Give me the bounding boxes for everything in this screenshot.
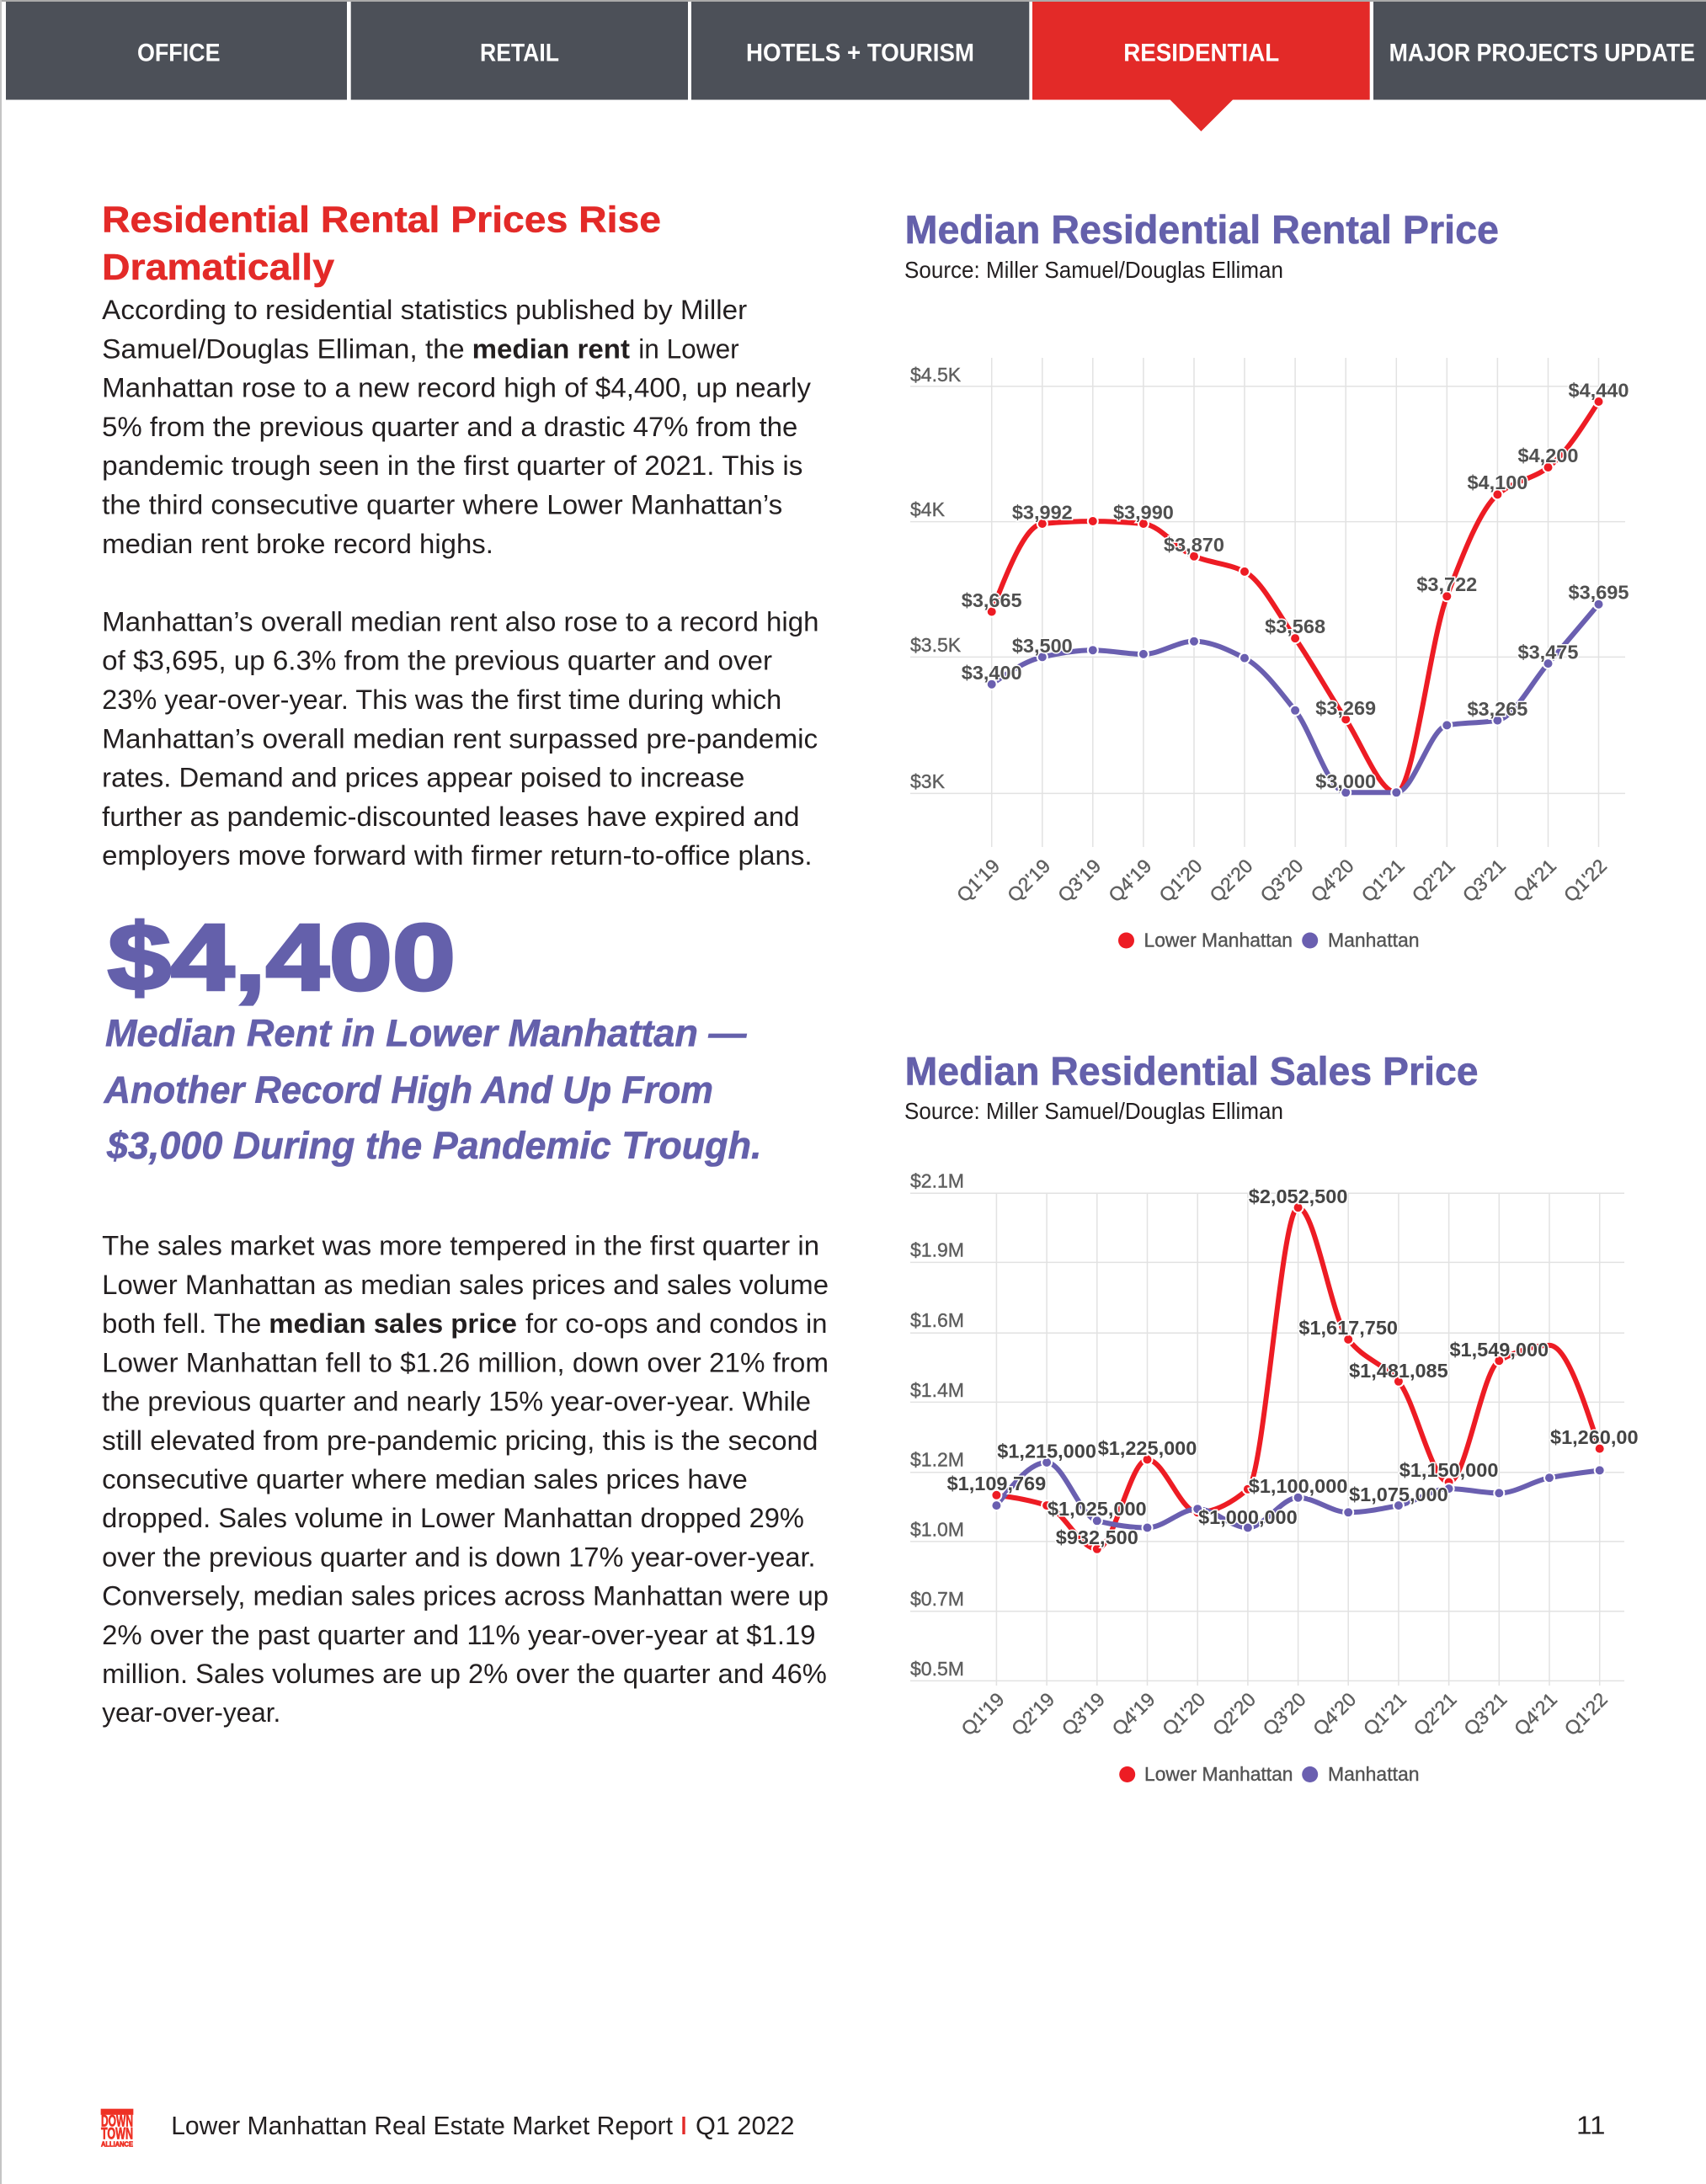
data labels [962, 379, 1629, 792]
x axis labels [952, 855, 1611, 906]
tab: retail [351, 2, 688, 99]
x axis labels [957, 1688, 1612, 1739]
text block: sales market paragraph: million. Sales volumes are up 2% over the quarter and 46% [102, 1659, 827, 1689]
text block: median rent paragraph: in Lower [638, 333, 739, 364]
tab: office: OFFICE [137, 40, 221, 67]
data labels: $3,400 [962, 662, 1022, 684]
text block: median rent paragraph: 5% from the previous quarter and a drastic 47% from the [102, 412, 797, 442]
y axis labels: $4K [910, 498, 946, 520]
panel: median residential sales price chart [904, 1049, 1639, 1785]
data labels: $3,000 [1315, 770, 1376, 792]
line: Lower Manhattan [992, 402, 1598, 792]
callout caption: Median Rent in Lower Manhattan — [105, 1012, 747, 1055]
tab: retail: RETAIL [480, 40, 559, 67]
text block: overall Manhattan rent paragraph: further as pandemic-discounted leases have expired and [102, 802, 799, 832]
data labels: $3,695 [1569, 582, 1629, 604]
x axis labels: Q4'19 [1104, 855, 1155, 906]
y axis labels: $0.7M [910, 1588, 964, 1610]
tab: hotels + tourism [691, 2, 1029, 99]
text block: overall Manhattan rent paragraph: of $3,695, up 6.3% from the previous quarter and over [102, 646, 772, 676]
text block: median rent paragraph: median rent [472, 333, 630, 364]
points: Manhattan [987, 599, 1603, 797]
text block: sales market paragraph: year-over-year. [102, 1697, 280, 1728]
points: Lower Manhattan [991, 1202, 1605, 1554]
navigation tabs [6, 2, 1706, 131]
heading: rental prices: Residential Rental Prices Rise [102, 200, 661, 241]
text block: overall Manhattan rent paragraph: rates. Demand and prices appear poised to increase [102, 763, 744, 793]
data labels: $1,260,00 [1550, 1426, 1639, 1448]
data labels: $1,025,000 [1048, 1498, 1147, 1520]
text block: median rent paragraph: Manhattan rose to a new record high of $4,400, up nearly [102, 373, 811, 403]
text block: sales market paragraph: both fell. The [102, 1308, 261, 1339]
data labels: $3,269 [1315, 697, 1376, 719]
text block: overall Manhattan rent paragraph: Manhattan’s overall median rent also rose to a record high [102, 606, 818, 637]
data labels: $3,990 [1113, 502, 1174, 524]
data labels: $3,475 [1518, 642, 1578, 663]
data labels: $1,000,000 [1198, 1506, 1298, 1528]
text block: median rent paragraph: median rent broke record highs. [102, 529, 493, 559]
text block: overall Manhattan rent paragraph: 23% year-over-year. This was the first time during which [102, 684, 781, 715]
callout caption [104, 1012, 761, 1167]
x axis labels: Q2'19 [1003, 855, 1054, 906]
text block: sales market paragraph: Lower Manhattan as median sales prices and sales volume [102, 1270, 829, 1300]
x axis labels: Q1'20 [1158, 1688, 1209, 1739]
x axis labels: Q3'21 [1459, 1688, 1511, 1739]
data labels: $2,052,500 [1249, 1185, 1347, 1207]
points: Lower Manhattan [987, 397, 1603, 797]
chart source: Source: Miller Samuel/Douglas Elliman [904, 1098, 1283, 1124]
tab: hotels + tourism: HOTELS + TOURISM [746, 40, 974, 67]
x axis labels: Q3'20 [1258, 1688, 1310, 1739]
y axis labels: $1.4M [910, 1379, 964, 1401]
chart source: Source: Miller Samuel/Douglas Elliman [904, 257, 1283, 283]
x axis labels: Q1'21 [1357, 855, 1409, 906]
text block: median rent paragraph: the third consecutive quarter where Lower Manhattan’s [102, 490, 782, 520]
tab: major projects update [1373, 2, 1706, 99]
text block: median rent paragraph: pandemic trough seen in the first quarter of 2021. This is [102, 450, 802, 481]
callout: $4,400 median rent [104, 904, 761, 1167]
data labels [947, 1185, 1639, 1548]
data labels: $4,440 [1569, 379, 1629, 401]
x axis labels: Q4'21 [1509, 855, 1560, 906]
legend: Lower Manhattan [1144, 930, 1293, 951]
line: Manhattan [992, 605, 1598, 792]
callout caption: Another Record High And Up From [104, 1068, 713, 1111]
x axis labels: Q1'19 [957, 1688, 1009, 1739]
x axis labels: Q4'20 [1309, 1688, 1360, 1739]
x axis labels: Q3'19 [1053, 855, 1105, 906]
tab: residential (active) [1032, 2, 1370, 131]
legend: Manhattan [1328, 1763, 1420, 1785]
text block: sales market paragraph: The sales market was more tempered in the first quarter in [102, 1231, 819, 1261]
data labels: $1,617,750 [1298, 1317, 1398, 1339]
x axis labels: Q2'21 [1408, 855, 1459, 906]
y axis labels: $2.1M [910, 1170, 964, 1192]
text block: overall Manhattan rent paragraph: Manhattan’s overall median rent surpassed pre-pandemic [102, 723, 818, 754]
x axis labels: Q1'22 [1559, 855, 1611, 906]
x axis labels: Q1'19 [952, 855, 1004, 906]
text block: sales market paragraph: for co-ops and condos in [525, 1308, 827, 1339]
tab: office [6, 2, 347, 99]
text block: sales market paragraph [102, 1231, 829, 1728]
x axis labels: Q1'20 [1154, 855, 1207, 906]
text block: sales market paragraph: dropped. Sales volume in Lower Manhattan dropped 29% [102, 1503, 804, 1533]
icon: Downtown Alliance logo: TOWN [101, 2125, 133, 2144]
data labels: $4,100 [1467, 471, 1527, 493]
text block: sales market paragraph: consecutive quarter where median sales prices have [102, 1464, 748, 1494]
data labels: $1,225,000 [1098, 1437, 1197, 1459]
data labels: $3,870 [1164, 534, 1224, 556]
x axis labels: Q3'20 [1256, 855, 1308, 906]
text block: median rent paragraph: Samuel/Douglas Elliman, the [102, 333, 465, 364]
panel: median residential rental price chart [904, 207, 1629, 951]
y axis labels [910, 364, 962, 792]
chart title: Median Residential Sales Price [905, 1049, 1479, 1093]
text block: median rent paragraph: According to residential statistics published by Miller [102, 295, 748, 325]
footer report title: Q1 2022 [696, 2111, 795, 2140]
text block: median rent paragraph [102, 295, 811, 559]
data labels: $1,215,000 [997, 1440, 1096, 1462]
x axis labels: Q2'21 [1409, 1688, 1461, 1739]
data labels: $1,109,769 [947, 1473, 1046, 1494]
x axis labels: Q3'21 [1458, 855, 1510, 906]
text block: sales market paragraph: Conversely, median sales prices across Manhattan were up [102, 1581, 829, 1611]
data labels: $3,265 [1467, 698, 1527, 720]
text block: sales market paragraph: over the previous quarter and is down 17% year-over-year. [102, 1542, 816, 1572]
tab: residential (active): RESIDENTIAL [1123, 40, 1279, 67]
text block: sales market paragraph: still elevated from pre-pandemic pricing, this is the second [102, 1425, 818, 1456]
data labels: $3,500 [1012, 635, 1073, 657]
data labels: $1,549,000 [1449, 1339, 1549, 1361]
text block: sales market paragraph: the previous quarter and nearly 15% year-over-year. While [102, 1387, 811, 1417]
data labels: $3,992 [1012, 502, 1073, 524]
data labels: $3,665 [962, 589, 1022, 611]
y axis labels: $4.5K [910, 364, 962, 386]
x axis labels: Q2'20 [1205, 855, 1257, 906]
data labels: $3,722 [1416, 573, 1477, 595]
data labels: $1,481,085 [1349, 1360, 1448, 1382]
footer [101, 2109, 1605, 2149]
y axis labels: $1.9M [910, 1239, 964, 1261]
legend: Manhattan [1328, 930, 1420, 951]
y axis labels: $1.2M [910, 1448, 964, 1470]
data labels: $1,100,000 [1249, 1475, 1347, 1497]
data labels: $3,568 [1265, 615, 1325, 637]
y axis labels: $3K [910, 770, 946, 792]
x axis labels: Q4'19 [1107, 1688, 1160, 1739]
text block: overall Manhattan rent paragraph [102, 606, 818, 871]
y axis labels: $1.6M [910, 1309, 964, 1331]
x axis labels: Q2'19 [1007, 1688, 1058, 1739]
heading: rental prices [102, 200, 661, 288]
icon: Downtown Alliance logo [101, 2109, 134, 2149]
callout caption: $3,000 During the Pandemic Trough. [106, 1124, 762, 1167]
y axis labels: $1.0M [910, 1519, 964, 1541]
data labels: $1,075,000 [1349, 1484, 1448, 1505]
x axis labels: Q3'19 [1058, 1688, 1109, 1739]
legend [1119, 1763, 1420, 1785]
line: Lower Manhattan [996, 1207, 1600, 1549]
legend: Lower Manhattan [1144, 1763, 1293, 1785]
y axis labels: $3.5K [910, 634, 962, 656]
icon: Downtown Alliance logo: DOWN [101, 2113, 133, 2130]
chart title: Median Residential Rental Price [905, 207, 1499, 252]
icon: Downtown Alliance logo: ALLIANCE [101, 2140, 134, 2149]
data labels: $932,500 [1056, 1526, 1138, 1548]
text block: sales market paragraph: 2% over the past quarter and 11% year-over-year at $1.19 [102, 1620, 816, 1650]
text block: sales market paragraph: Lower Manhattan fell to $1.26 million, down over 21% from [102, 1347, 829, 1377]
legend [1118, 930, 1420, 951]
heading: rental prices: Dramatically [102, 247, 335, 288]
x axis labels: Q1'21 [1359, 1688, 1410, 1739]
x axis labels: Q2'20 [1208, 1688, 1260, 1739]
callout number: $4,400 [108, 904, 456, 1010]
x axis labels: Q4'21 [1510, 1688, 1561, 1739]
text block: sales market paragraph: median sales price [269, 1308, 517, 1339]
data labels: $1,150,000 [1399, 1459, 1498, 1481]
page number: 11 [1576, 2110, 1605, 2140]
y axis labels: $0.5M [910, 1658, 964, 1680]
y axis labels [910, 1170, 964, 1680]
text block: overall Manhattan rent paragraph: employers move forward with firmer return-to-office plans. [102, 840, 813, 871]
points: Manhattan [991, 1457, 1605, 1532]
x axis labels: Q4'20 [1306, 855, 1358, 906]
data labels: $4,200 [1518, 445, 1578, 466]
x axis labels: Q1'22 [1560, 1688, 1612, 1739]
footer report title: Lower Manhattan Real Estate Market Report [171, 2111, 673, 2140]
line: Manhattan [996, 1462, 1600, 1527]
